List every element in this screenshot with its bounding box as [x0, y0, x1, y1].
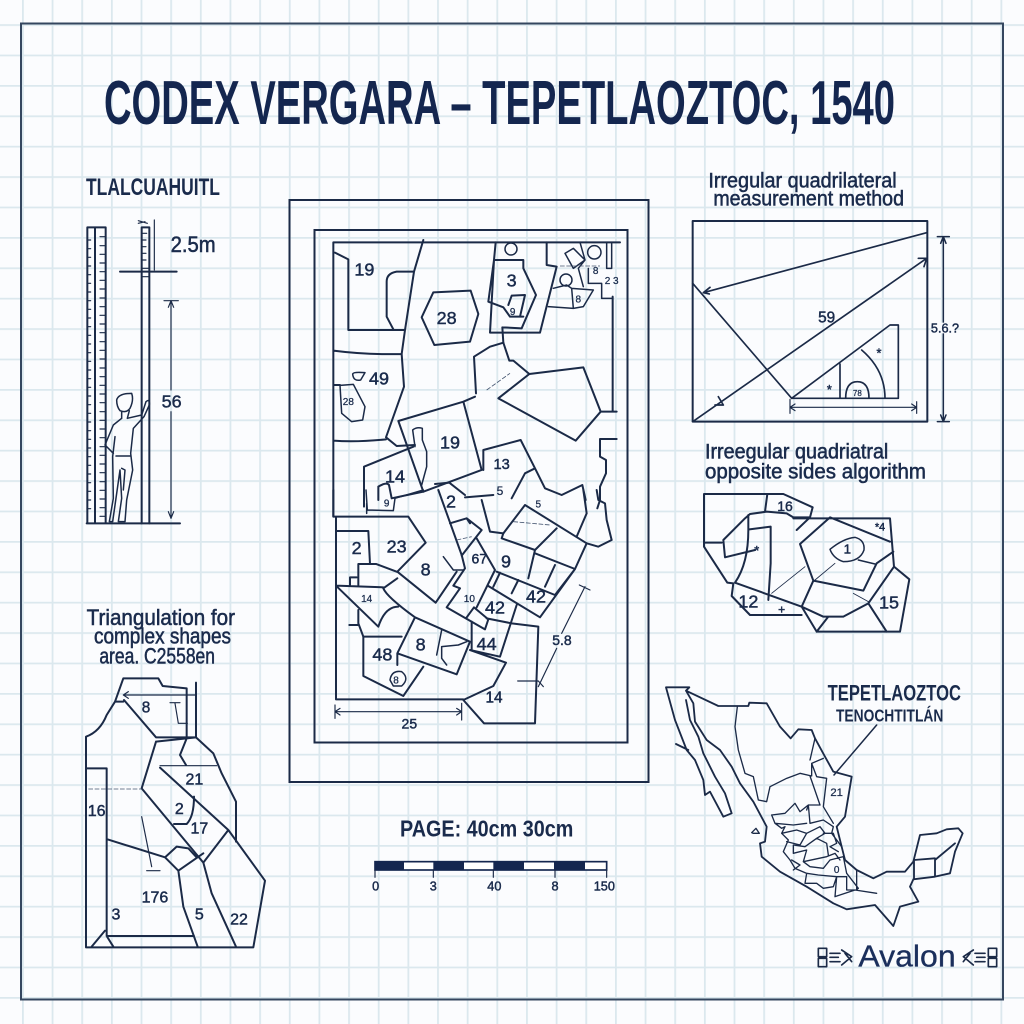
parcel numbers: upper half: 19 — [354, 259, 374, 279]
parcels diagram — [704, 494, 909, 632]
logo: Avalon — [818, 940, 997, 974]
geometry diagram: * — [827, 383, 832, 397]
triangulated shape diagram: 16 — [88, 803, 106, 820]
scale bar — [372, 862, 615, 893]
parcel numbers: lower half: 9 — [384, 499, 390, 510]
triangulated shape diagram: 2 — [175, 801, 184, 818]
scale bar: 8 — [551, 879, 559, 893]
logo: Avalon: Avalon — [858, 940, 956, 974]
dimension: 25: 25 — [402, 716, 417, 732]
parcel numbers: lower half: 8 — [421, 559, 431, 579]
parcel numbers: lower half: 8 — [416, 634, 426, 654]
dimension: 25 — [335, 703, 462, 732]
parcels diagram: 15 — [879, 593, 899, 613]
scale bar: 0 — [372, 879, 379, 893]
parcel numbers: lower half: 14 — [485, 689, 503, 706]
parcel numbers: upper half: 9 — [510, 307, 516, 318]
triangulated shape diagram: 17 — [190, 820, 208, 837]
parcels diagram: 12 — [738, 591, 758, 611]
dimension: 56: 56 — [162, 391, 182, 411]
icon: person holding post — [105, 393, 149, 522]
scale bar: 3 — [430, 879, 437, 893]
parcel numbers: lower half: 8 — [393, 676, 399, 687]
island — [752, 828, 759, 833]
parcel numbers: lower half: 2 — [446, 491, 456, 511]
parcel numbers: lower half: 48 — [372, 644, 392, 664]
triangulated shape diagram: 5 — [195, 906, 204, 923]
parcels diagram: 1 — [844, 541, 851, 556]
panel: tlalcuahuitl measuring rod — [86, 174, 220, 523]
label: 2.5m: 2.5m — [171, 232, 216, 257]
heading: opposite sides algorithm — [705, 439, 926, 483]
parcel numbers: lower half: 14 — [361, 594, 373, 605]
geometry diagram: * — [877, 346, 882, 360]
heading: tlalcuahuitl: TLALCUAHUITL — [86, 174, 220, 201]
heading: measurement method: Irregular quadrilateral — [708, 168, 897, 192]
map parcels: lower half — [333, 490, 612, 732]
panel: irregular quadrilateral measurement — [693, 168, 959, 422]
dimension: 5.8: 5.8 — [552, 632, 572, 648]
heading: opposite sides algorithm: opposite sides algorithm — [705, 459, 926, 483]
parcel numbers: lower half: 23 — [387, 537, 407, 557]
panel: page scale — [372, 816, 615, 893]
parcels diagram: + — [778, 602, 785, 616]
triangulated shape diagram: 8 — [142, 700, 150, 717]
triangulated shape diagram — [86, 678, 265, 947]
panel: triangulation for complex shapes — [86, 605, 265, 947]
heading: page size: PAGE: 40cm 30cm — [400, 816, 573, 842]
measuring post — [120, 220, 177, 523]
triangulated shape diagram: 3 — [112, 906, 121, 923]
parcels diagram: *4 — [875, 522, 885, 534]
panel: codex page map — [290, 200, 648, 782]
parcel numbers: upper half: 14 — [385, 467, 405, 487]
parcel numbers: upper half: 28 — [343, 397, 354, 408]
heading: triangulation — [87, 605, 235, 668]
page inner frame — [314, 230, 628, 742]
parcel numbers: lower half: 10 — [464, 594, 475, 605]
triangulated shape diagram: 21 — [185, 772, 203, 789]
parcel numbers: lower half: 42 — [526, 586, 546, 606]
ruler — [87, 227, 180, 523]
map outline — [666, 687, 963, 926]
heading: triangulation: complex shapes — [94, 623, 231, 648]
parcel numbers: upper half: 3 — [507, 271, 517, 291]
parcels diagram: * — [754, 544, 759, 558]
heading: opposite sides algorithm: Irreegular quadriatral — [705, 439, 888, 463]
parcel numbers: upper half: 8 — [593, 266, 599, 277]
parcel numbers: upper half: 5 — [497, 484, 504, 498]
dimension: 56 — [162, 301, 182, 518]
geometry diagram: 5.6.? — [931, 322, 959, 336]
parcel numbers: lower half: 67 — [472, 550, 487, 566]
parcel numbers: lower half: 9 — [501, 551, 511, 571]
geometry diagram: 59 — [818, 309, 835, 326]
map parcels: upper half — [333, 240, 620, 517]
parcel numbers: lower half: 2 — [352, 538, 362, 558]
page outer frame — [290, 200, 648, 782]
map numbers: 0 — [834, 865, 840, 876]
parcel numbers: upper half: 19 — [440, 432, 460, 452]
state borders — [735, 707, 877, 897]
parcel numbers: lower half: 44 — [477, 634, 497, 654]
label: Tepetlaoztoc: TEPETLAOZTOC — [828, 681, 961, 706]
leader line — [834, 725, 877, 775]
panel: map of Mexico — [666, 681, 997, 974]
dimension: 5.8 — [518, 585, 590, 687]
map numbers — [830, 787, 843, 876]
geometry diagram: 78 — [853, 389, 862, 398]
panel: opposite sides algorithm — [704, 439, 926, 632]
parcel numbers: upper half: 13 — [494, 457, 510, 473]
parcel numbers: upper half: 8 — [576, 295, 582, 306]
heading: measurement method — [708, 168, 904, 211]
map numbers: 21 — [830, 787, 843, 799]
triangulated shape diagram: 176 — [142, 890, 168, 907]
parcel numbers: lower half: 42 — [485, 598, 505, 618]
parcel numbers: lower half — [352, 491, 546, 706]
label: Tenochtitlan: TENOCHTITLÁN — [836, 705, 943, 726]
heading: measurement method: measurement method — [713, 187, 904, 211]
parcel numbers: upper half: 2 3 — [605, 276, 619, 287]
parcel numbers: upper half: 49 — [369, 368, 389, 388]
parcel numbers: upper half — [343, 259, 619, 498]
triangulated shape diagram: 22 — [230, 912, 248, 929]
geometry diagram — [693, 221, 959, 422]
parcels diagram: 16 — [777, 498, 793, 514]
heading: triangulation: area. C2558en — [99, 643, 215, 668]
parcel numbers: upper half: 28 — [437, 308, 457, 328]
heading: triangulation: Triangulation for — [87, 605, 235, 630]
scale bar: 40 — [487, 879, 501, 893]
scale bar: 150 — [594, 879, 615, 893]
parcel numbers: lower half: 5 — [536, 499, 542, 510]
